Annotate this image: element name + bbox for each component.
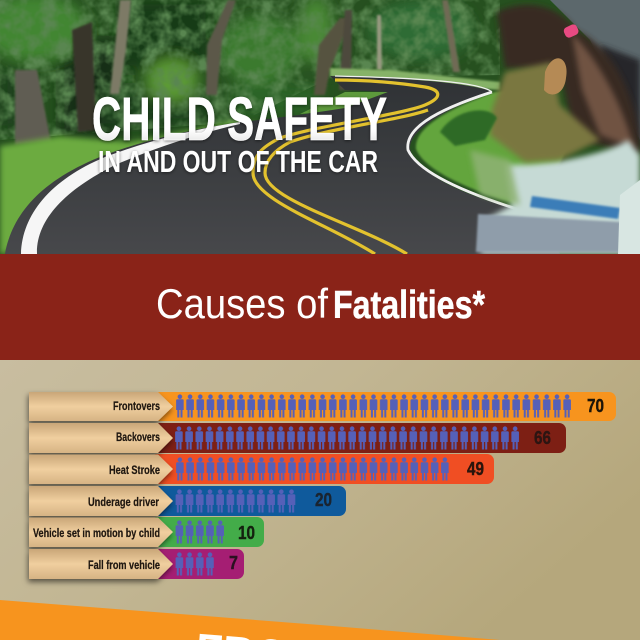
inner grass strip xyxy=(300,92,388,114)
white edge lines xyxy=(21,76,530,254)
shirt xyxy=(480,140,640,254)
bar: Backovers 66: 66 xyxy=(534,428,551,448)
hair xyxy=(497,5,640,155)
embroidery xyxy=(530,196,620,219)
sleeve xyxy=(618,180,640,254)
left grass verge xyxy=(0,120,260,254)
bar: Frontovers 70: 70 xyxy=(587,396,604,416)
heading xyxy=(156,280,486,327)
bar: Backovers 66 xyxy=(150,423,566,453)
heading: Causes of xyxy=(156,280,328,327)
category labels: Underage driver xyxy=(88,495,159,509)
bar: Vehicle set in motion by child 10 xyxy=(150,517,264,547)
bar: Fall from vehicle 7: 7 xyxy=(229,553,238,573)
face xyxy=(490,62,600,162)
road surface xyxy=(5,76,560,254)
category labels: Vehicle set in motion by child xyxy=(33,526,160,540)
child figure xyxy=(440,0,640,254)
hero photo: forest road and child xyxy=(0,0,640,254)
yellow centre lines xyxy=(253,80,438,254)
hair tie xyxy=(562,23,580,39)
panel: orange next-section band xyxy=(0,600,500,640)
title xyxy=(92,85,387,179)
far grass xyxy=(330,68,500,90)
category labels: Frontovers xyxy=(113,399,160,413)
heading: Fatalities* xyxy=(333,284,486,327)
title: IN AND OUT OF THE CAR xyxy=(98,144,378,179)
panel: chart background xyxy=(0,360,640,640)
tree trunks xyxy=(15,0,460,145)
bar: Heat Stroke 49: 49 xyxy=(467,459,484,479)
right grass verge xyxy=(416,90,570,210)
ear xyxy=(544,58,567,94)
title: CHILD SAFETY xyxy=(92,85,387,153)
category labels: Backovers xyxy=(116,430,160,444)
forest background xyxy=(0,0,640,254)
bar chart: causes of fatalities xyxy=(29,392,616,579)
bar: Underage driver 20: 20 xyxy=(315,490,332,510)
bar: Heat Stroke 49 xyxy=(150,454,494,484)
roadside bush xyxy=(440,110,497,146)
category labels xyxy=(29,392,173,579)
bar: Frontovers 70 xyxy=(150,392,616,421)
bar: Fall from vehicle 7 xyxy=(150,549,244,579)
bar: Vehicle set in motion by child 10: 10 xyxy=(238,523,255,543)
shirt band xyxy=(476,214,620,252)
shirt fade xyxy=(470,150,520,205)
panel: section header band xyxy=(0,254,640,360)
category labels: Fall from vehicle xyxy=(88,558,160,572)
car interior xyxy=(550,0,640,140)
bar: Underage driver 20 xyxy=(150,486,346,516)
category labels: Heat Stroke xyxy=(109,463,160,477)
